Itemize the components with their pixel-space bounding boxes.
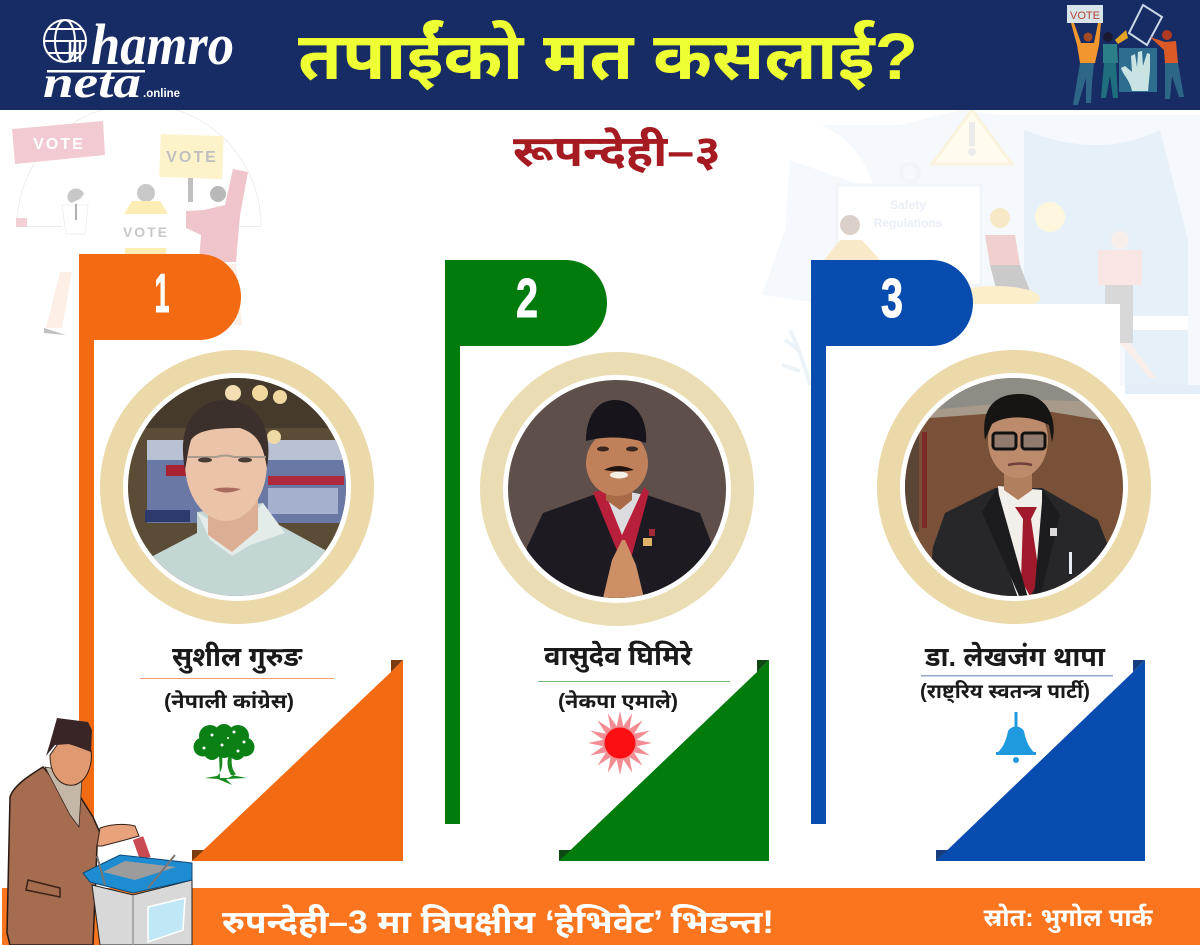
title: तपाईंको मत कसलाई? [298,19,918,93]
footer source: स्रोत: भुगोल पार्क [984,903,1154,933]
footer band [2,888,1200,945]
portrait 1 [128,378,347,600]
logo globe [44,20,86,62]
icon: activists with vote sign and ballot hand: VOTE [1070,10,1100,22]
subtitle: constituency: रूपन्देही–३ [513,127,721,176]
background illustration: voters with signs: VOTE [33,136,85,153]
illustration: man casting vote [7,718,192,945]
corner triangle 1 [192,660,403,861]
icon: tree [194,724,254,785]
name 1: सुशील गुरुङ [172,642,303,673]
background illustration: safety regulations scene: Regulations [874,216,943,230]
flag 1 [79,254,241,860]
header band [0,0,1200,110]
portrait 3 [905,378,1123,600]
corner triangle 3 [936,660,1145,861]
icon: bell [996,712,1036,763]
flag 3: 3 [881,267,903,329]
logo: Hamro Neta online [43,12,234,107]
divider [921,675,1113,676]
portrait ring 1 [100,350,374,624]
divider [538,681,730,682]
logo: Hamro Neta online: neta [43,58,141,107]
candidate 1 [79,254,403,861]
flag 1: 1 [154,262,170,324]
background illustration: safety regulations scene: Safety [890,198,926,212]
party 3: (राष्ट्रिय स्वतन्त्र पार्टी) [920,679,1090,704]
ballot box [83,855,192,945]
corner triangle 2 [559,660,769,861]
flag 2 [445,260,607,824]
background illustration: voters with signs: VOTE [123,224,169,240]
logo: Hamro Neta online: .online [143,88,180,100]
divider [140,678,334,679]
flag 2: 2 [516,267,538,329]
background illustration: voters with signs: VOTE [166,149,218,166]
candidate 2 [445,260,769,861]
portrait 2 [508,380,726,600]
candidate 3 [811,260,1151,861]
name 2: वासुदेव घिमिरे [544,640,693,672]
portrait ring 2 [480,352,754,626]
icon: activists with vote sign and ballot hand [1067,5,1184,105]
background illustration: safety regulations scene [762,110,1200,386]
party 1: (नेपाली कांग्रेस) [164,689,294,713]
logo wordmark: hamro [91,12,234,77]
portrait ring 3 [877,350,1151,624]
flag 3 [811,260,973,824]
party 2: (नेकपा एमाले) [558,689,678,713]
white panel behind candidate 3 [826,304,1120,862]
icon: sun [588,711,652,775]
background illustration: voters with signs [12,104,261,335]
footer headline: रुपन्देही–3 मा त्रिपक्षीय ‘हेभिवेट’ भिडन्त! [222,904,774,940]
name 3: डा. लेखजंग थापा [924,641,1106,672]
